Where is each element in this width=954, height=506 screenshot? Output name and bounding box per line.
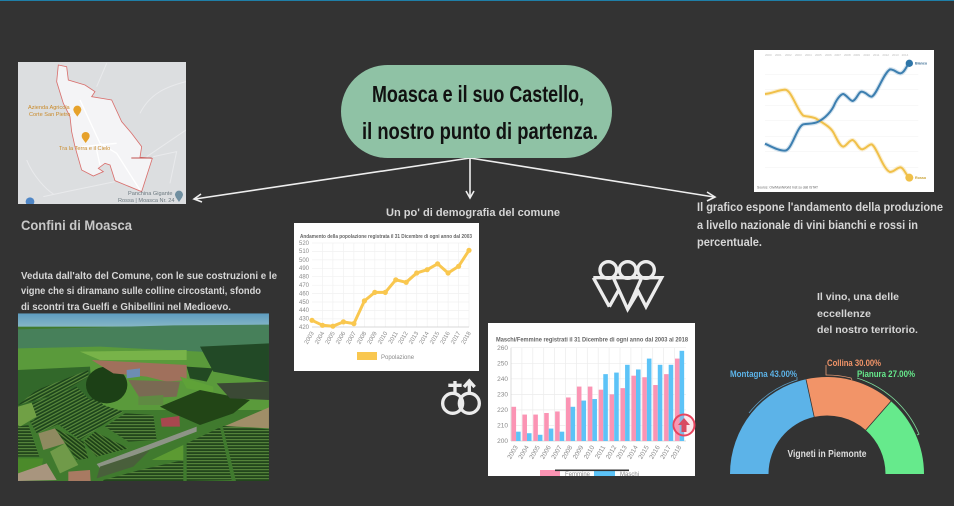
bar chart: maschi e femmine: 240: [497, 376, 508, 383]
icon: group of people: [593, 262, 662, 309]
line chart: vini bianchi e rossi: [754, 50, 934, 192]
map of Moasca: Tra la Terra e il Cielo: [59, 146, 110, 152]
line chart: vini bianchi e rossi: 2008: [844, 53, 851, 57]
description of wine chart: a livello nazionale di vini bianchi e rossi in: [697, 218, 918, 232]
line chart: popolazione: 2017: [450, 330, 463, 346]
line chart: popolazione: 430: [299, 316, 310, 322]
map of Moasca: Rossa | Moasca Nr. 24: [118, 198, 174, 204]
line chart: vini bianchi e rossi: 2013: [892, 53, 899, 57]
top accent line: [0, 0, 954, 1]
line chart: vini bianchi e rossi: Source: Oiv/ManiWorld Inst su dati ISTAT: [757, 186, 818, 190]
line chart: popolazione: 420: [299, 325, 310, 331]
gauge chart: vigneti in Piemonte: Pianura 27.00%: [857, 369, 915, 379]
bar chart: maschi e femmine: [488, 323, 695, 478]
bar chart: maschi e femmine: Maschi: [620, 472, 639, 478]
bar chart: maschi e femmine: 2010: [583, 444, 596, 461]
line chart: vini bianchi e rossi: 2004: [805, 53, 812, 57]
line chart: vini bianchi e rossi: 2012: [882, 53, 889, 57]
bar chart: maschi e femmine: 2004: [517, 444, 531, 461]
line chart: vini bianchi e rossi: 2003: [795, 53, 802, 57]
description of aerial view: [21, 271, 277, 313]
bar chart: maschi e femmine: 2013: [615, 444, 629, 461]
bar chart: maschi e femmine: 210: [497, 422, 508, 430]
bar chart: maschi e femmine: 2007: [550, 444, 564, 461]
map of Moasca: Panchina Gigante: [128, 191, 172, 197]
line chart: popolazione: 480: [299, 274, 310, 280]
icon: gender rings: [443, 381, 479, 413]
line chart: vini bianchi e rossi: 2006: [825, 53, 832, 57]
bar chart: maschi e femmine: 230: [497, 392, 508, 398]
bar chart: maschi e femmine: 2008: [561, 444, 574, 461]
bar chart: maschi e femmine: 2015: [637, 444, 651, 461]
heading: il vino: del nostro territorio.: [817, 324, 918, 336]
bar chart: maschi e femmine: 2017: [659, 444, 673, 461]
line chart: popolazione: 2005: [325, 330, 337, 346]
line chart: vini bianchi e rossi: 2011: [873, 53, 880, 57]
map of Moasca: Corte San Pietro: [29, 112, 70, 118]
line chart: vini bianchi e rossi: 2010: [863, 53, 870, 57]
description of aerial view: Veduta dall'alto del Comune, con le sue costruzioni e le: [21, 271, 277, 282]
line chart: popolazione: 2018: [461, 330, 473, 346]
line chart: popolazione: 2004: [314, 330, 327, 346]
heading: il vino: eccellenze: [817, 308, 871, 320]
bar chart: maschi e femmine: 2006: [539, 444, 553, 461]
gauge chart: vigneti in Piemonte: Vigneti in Piemonte: [788, 449, 867, 460]
title pill: Moasca e il suo Castello,: [372, 81, 584, 107]
line chart: vini bianchi e rossi: Bianco: [915, 62, 928, 66]
heading: il vino: [817, 291, 918, 336]
bar chart: maschi e femmine: 220: [497, 407, 508, 414]
line chart: popolazione: Andamento della popolazione registrata il 31 Dicembre di ogni anno dal 2003: [300, 234, 472, 240]
icon: red up arrow in circle: [674, 414, 694, 436]
line chart: popolazione: 510: [299, 249, 310, 255]
description of aerial view: di scontri tra Guelfi e Ghibellini nel Medioevo.: [21, 302, 231, 313]
description of wine chart: percentuale.: [697, 235, 762, 249]
bar chart: maschi e femmine: 250: [497, 360, 508, 368]
line chart: popolazione: 460: [299, 292, 310, 298]
line chart: vini bianchi e rossi: 2000: [765, 53, 772, 57]
heading: confini: Confini di Moasca: [21, 217, 132, 233]
description of wine chart: [697, 200, 943, 249]
line chart: popolazione: [294, 223, 479, 371]
bar chart: maschi e femmine: Maschi/Femmine registrati il 31 Dicembre di ogni anno dal 2003 al 2018: [496, 338, 689, 344]
line chart: vini bianchi e rossi: 2014: [902, 53, 909, 57]
line chart: vini bianchi e rossi: 2002: [785, 53, 792, 57]
line chart: popolazione: 2015: [429, 330, 442, 346]
line chart: popolazione: 2008: [356, 330, 369, 346]
line chart: popolazione: 2010: [377, 330, 390, 346]
line chart: popolazione: 2006: [335, 330, 348, 346]
line chart: popolazione: 500: [299, 258, 310, 264]
bar chart: maschi e femmine: 2016: [648, 444, 662, 461]
bar chart: maschi e femmine: 200: [497, 438, 508, 445]
line chart: popolazione: 2014: [419, 330, 431, 346]
map of Moasca: [18, 62, 186, 206]
line chart: vini bianchi e rossi: 2009: [853, 53, 860, 57]
map of Moasca: Azienda Agricola: [28, 105, 71, 111]
line chart: vini bianchi e rossi: 2005: [815, 53, 822, 57]
line chart: vini bianchi e rossi: 2001: [775, 53, 782, 57]
title pill: [341, 65, 612, 158]
line chart: popolazione: 470: [299, 283, 310, 289]
line chart: popolazione: 2013: [408, 330, 421, 346]
description of aerial view: vigne che si diramano sulle colline circostanti, sfondo: [21, 286, 261, 297]
line chart: popolazione: 2007: [346, 330, 358, 346]
line chart: popolazione: 450: [299, 300, 310, 306]
line chart: vini bianchi e rossi: Rosso: [915, 176, 927, 180]
bar chart: maschi e femmine: 2005: [528, 444, 542, 461]
title pill: il nostro punto di partenza.: [362, 118, 598, 144]
line chart: popolazione: 2011: [388, 330, 400, 345]
line chart: popolazione: 2003: [304, 330, 316, 346]
bar chart: maschi e femmine: Femmine: [565, 472, 591, 478]
gauge chart: vigneti in Piemonte: Collina 30.00%: [827, 358, 881, 368]
line chart: popolazione: 2016: [440, 330, 452, 346]
arrows from title: [194, 158, 715, 202]
line chart: popolazione: 520: [299, 241, 310, 247]
line chart: popolazione: 2009: [367, 330, 379, 346]
line chart: popolazione: 440: [299, 308, 310, 314]
heading: il vino: Il vino, una delle: [817, 291, 899, 303]
bar chart: maschi e femmine: 260: [497, 345, 508, 352]
gauge chart: vigneti in Piemonte: [730, 358, 924, 474]
bar chart: maschi e femmine: 2012: [605, 444, 618, 461]
bar chart: maschi e femmine: 2018: [670, 444, 683, 461]
section heading: demografia: Un po' di demografia del comune: [386, 207, 560, 219]
bar chart: maschi e femmine: 2014: [626, 444, 640, 461]
bar chart: maschi e femmine: 2009: [572, 444, 585, 461]
aerial photo of Moasca: [18, 313, 269, 481]
bar chart: maschi e femmine: 2003: [506, 444, 520, 461]
gauge chart: vigneti in Piemonte: Montagna 43.00%: [730, 369, 797, 379]
bar chart: maschi e femmine: 2011: [594, 444, 607, 460]
line chart: popolazione: Popolazione: [381, 355, 415, 361]
line chart: popolazione: 490: [299, 266, 310, 272]
line chart: popolazione: 2012: [398, 330, 410, 346]
line chart: vini bianchi e rossi: 2007: [834, 53, 841, 57]
